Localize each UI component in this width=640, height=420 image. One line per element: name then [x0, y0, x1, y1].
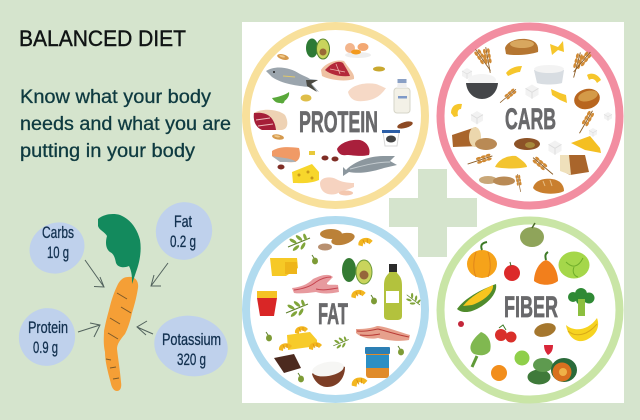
icon: pumpkin	[467, 242, 497, 278]
icon: red beans	[278, 151, 338, 170]
bubble: protein	[11, 300, 83, 374]
icon: butter block	[270, 258, 298, 276]
icon: milk bottle	[394, 79, 410, 113]
icon: cheese	[292, 164, 319, 183]
bubble: protein: Protein	[28, 319, 68, 337]
white food panel	[242, 22, 624, 403]
bubble: carbs: 10 g	[47, 244, 69, 262]
icon: fries	[257, 291, 277, 316]
icon: olive	[398, 346, 404, 355]
icon: butter curl	[352, 377, 367, 387]
fat label: FAT	[318, 298, 348, 331]
icon: sugar cube 2	[471, 111, 483, 124]
icon: corn	[457, 284, 496, 312]
icon: banana	[566, 318, 598, 341]
icon: fish	[266, 67, 319, 92]
icon: bow pasta	[550, 41, 564, 55]
carrot nutrition diagram	[11, 193, 233, 391]
icon: berry	[458, 321, 464, 327]
icon: small wheat	[498, 87, 518, 105]
panel: fiber	[440, 220, 620, 400]
icon: pasta sticks	[571, 136, 601, 153]
bubble: carbs	[21, 214, 93, 282]
icon: bacon	[292, 275, 339, 294]
fat ring	[246, 220, 425, 399]
icon: apple	[504, 262, 520, 281]
icon: green apple	[514, 350, 530, 366]
icon: ham	[254, 110, 287, 130]
icon: butter curl	[351, 290, 366, 298]
panel: fat	[246, 220, 425, 399]
icon: bread loaf top	[505, 39, 538, 55]
bubble: potassium	[149, 309, 233, 383]
icon: sugar cubes right	[589, 112, 612, 137]
title: BALANCED DIET	[19, 26, 186, 51]
subtitle text block	[20, 87, 231, 162]
icon: butter curl top	[358, 238, 373, 246]
icon: wheat right	[570, 50, 593, 78]
carb label: CARB	[505, 103, 556, 136]
icon: yellow beans	[373, 66, 385, 72]
bubble: potassium: Potassium	[162, 331, 221, 349]
icon: coconut	[311, 359, 345, 387]
arrow: carbs	[85, 260, 104, 287]
icon: sugar cube top	[462, 68, 472, 79]
icon: bun	[572, 86, 602, 112]
carrot	[104, 277, 138, 391]
arrow: protein	[78, 323, 100, 337]
icon: wheat left	[473, 47, 494, 73]
icon: avocado	[306, 38, 330, 59]
icon: loaf with slices	[452, 127, 497, 150]
icon: steak	[321, 60, 354, 80]
protein ring	[246, 26, 425, 205]
icon: sugar cube	[526, 84, 538, 99]
bubble: protein: 0.9 g	[33, 339, 58, 357]
icon: squash	[520, 223, 544, 247]
icon: olive branch	[286, 299, 308, 318]
icon: olive branch	[333, 336, 349, 349]
icon: sugar cubes	[548, 140, 562, 155]
icon: wheat 4	[531, 155, 555, 177]
icon: orange	[491, 365, 507, 381]
bubble: fat: Fat	[174, 213, 192, 231]
icon: bread slices	[479, 176, 515, 186]
icon: macaroni	[587, 74, 601, 83]
icon: strawberry	[544, 345, 553, 355]
carb ring	[440, 26, 620, 206]
icon: olive	[371, 295, 377, 304]
bubble: potassium: 320 g	[177, 351, 206, 369]
icon: crusty bread	[533, 179, 564, 194]
icon: pumpkin group	[528, 358, 577, 384]
fiber ring	[440, 220, 620, 400]
icon: chicken leg	[320, 177, 354, 196]
icon: macaroni 2	[451, 104, 462, 117]
icon: red meat	[337, 140, 370, 156]
icon: peanuts	[318, 229, 356, 250]
icon: cabbage	[558, 252, 590, 278]
icon: beans	[300, 94, 312, 102]
icon: bowl	[466, 74, 498, 99]
fiber label: FIBER	[504, 291, 558, 324]
protein label: PROTEIN	[299, 106, 378, 139]
icon: potatoes	[514, 138, 540, 150]
icon: peas	[272, 92, 289, 104]
icon: salmon	[272, 147, 300, 162]
icon: silver fish	[343, 156, 397, 176]
icon: pasta	[506, 66, 522, 76]
subtitle text block: putting in your body	[20, 141, 196, 162]
panel: protein	[246, 26, 425, 205]
subtitle text block: needs and what you are	[20, 114, 231, 135]
bubble: carbs: Carbs	[42, 224, 74, 242]
icon: yogurt	[382, 130, 400, 146]
icon: olive oil bottle	[384, 264, 402, 320]
icon: tomatoes	[495, 325, 516, 342]
bubble: fat	[146, 193, 222, 269]
carrot leaves	[98, 214, 141, 284]
icon: wheat 3	[577, 109, 595, 135]
arrow: potassium	[137, 321, 153, 335]
icon: eggs	[345, 43, 371, 58]
subtitle text block: Know what your body	[20, 87, 212, 108]
bubble: fat: 0.2 g	[170, 233, 196, 251]
icon: nut top left	[277, 53, 289, 61]
icon: bacon 2	[356, 326, 410, 341]
icon: olive branch top	[288, 233, 310, 252]
plus sign	[389, 169, 477, 257]
icon: flour jar	[534, 65, 564, 84]
icon: olive	[266, 332, 272, 341]
icon: rice pile	[495, 156, 527, 168]
icon: cheese block	[279, 326, 322, 351]
icon: olive branch right	[404, 290, 423, 310]
panel: carb	[440, 26, 620, 206]
icon: orange pumpkin	[534, 252, 558, 285]
icon: square loaf	[560, 155, 589, 175]
icon: bow pasta 2	[551, 89, 567, 103]
icon: artichoke	[470, 332, 491, 367]
icon: nut butter jar	[365, 347, 390, 378]
icon: potato	[533, 321, 557, 339]
icon: chocolate	[274, 354, 301, 373]
icon: wheat 5	[515, 174, 523, 192]
icon: broccoli	[568, 288, 594, 316]
icon: wheat long	[467, 153, 493, 167]
arrow: fat	[151, 263, 168, 286]
icon: chicken	[348, 83, 386, 101]
icon: nuts	[272, 120, 414, 141]
icon: olive	[312, 255, 318, 264]
icon: avocado	[342, 258, 372, 284]
icon: olive	[298, 373, 304, 382]
